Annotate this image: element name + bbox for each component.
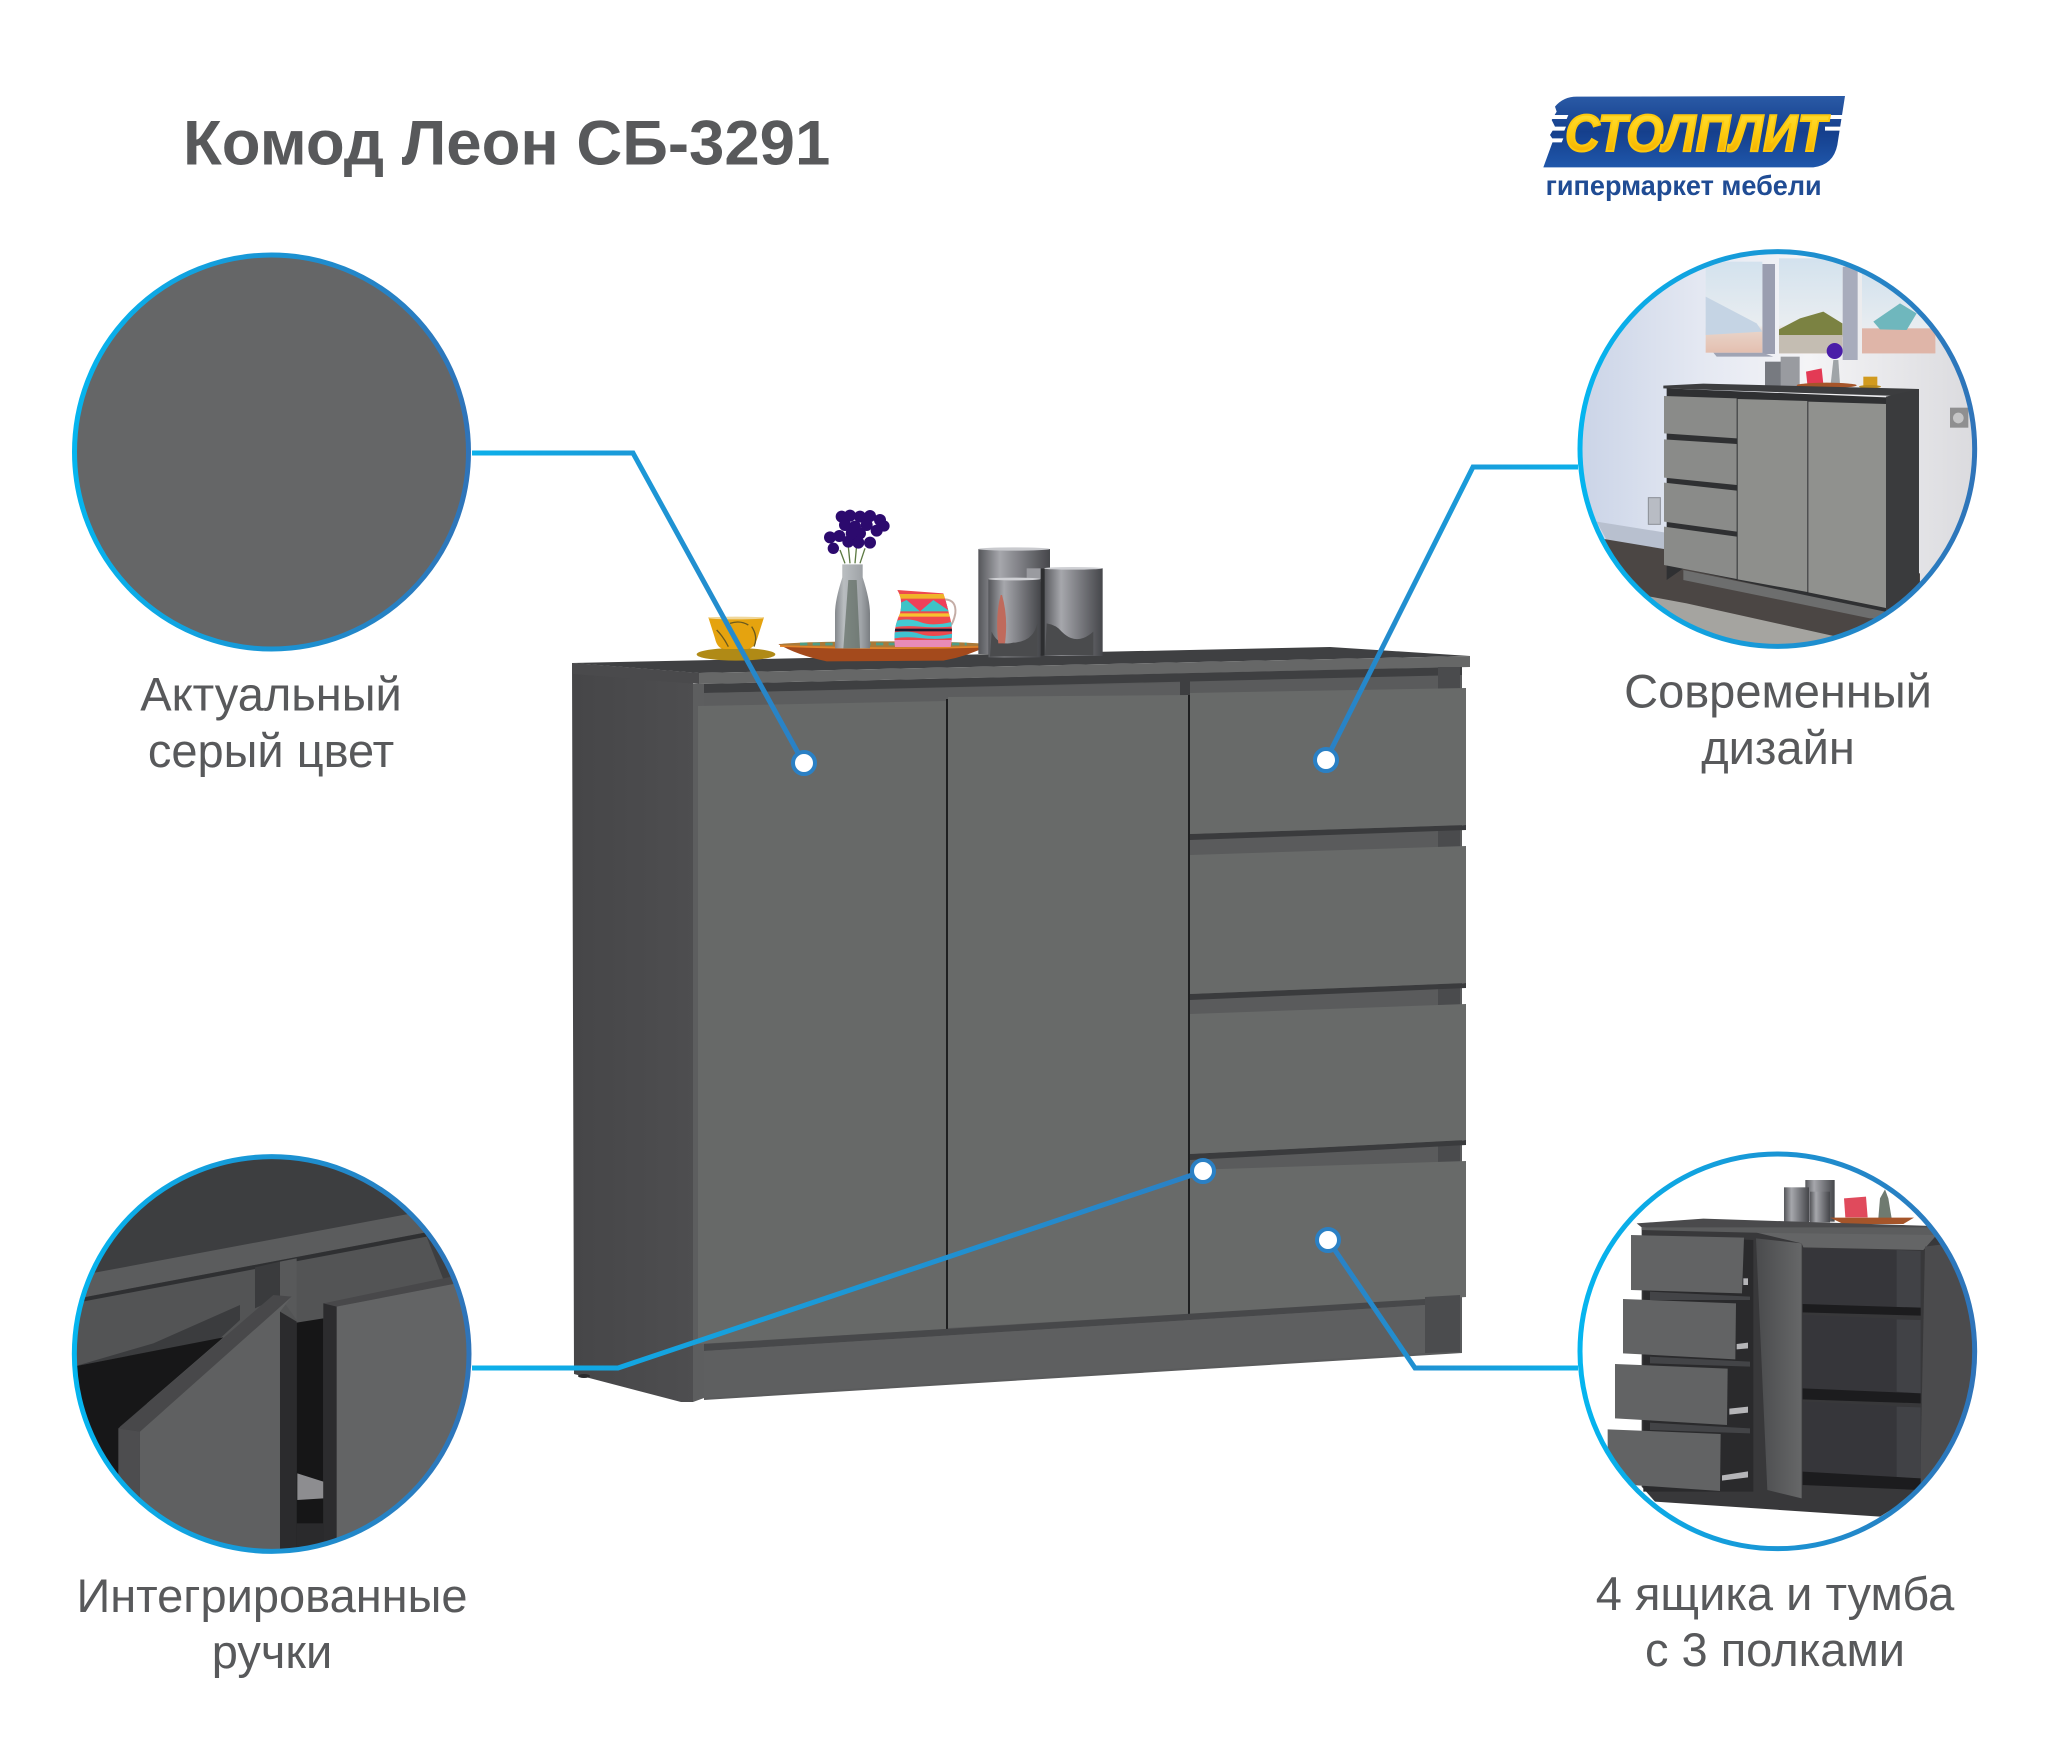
connector: drawers	[1328, 1240, 1578, 1368]
top front edge	[699, 656, 1470, 684]
chest of drawers	[572, 647, 1470, 1402]
logo tagline: гипермаркет мебели	[1546, 170, 1822, 201]
upper notch	[1180, 680, 1190, 699]
carcass	[1636, 1218, 1928, 1228]
connector: handles	[472, 1171, 1204, 1368]
title: Комод Леон СБ-3291	[183, 108, 830, 178]
cabinet top surface	[572, 647, 1470, 673]
open door	[1756, 1238, 1802, 1498]
socket and switch	[1648, 408, 1968, 524]
decor	[1784, 1180, 1914, 1224]
foot	[578, 1374, 590, 1378]
vase	[835, 564, 870, 648]
drawer fronts	[1631, 1235, 1744, 1293]
plinth shadow	[704, 1299, 1425, 1351]
carcass recess	[699, 667, 1462, 1400]
metal canisters	[978, 547, 1103, 657]
right leg	[1425, 1295, 1460, 1353]
flowers stems	[840, 545, 865, 563]
left door	[698, 701, 946, 1344]
label: handles: Интегрированные	[76, 1569, 468, 1622]
label: drawers and shelves: 4 ящика и тумба	[1596, 1567, 1954, 1620]
vase stems	[843, 580, 860, 648]
shelves	[1803, 1248, 1921, 1490]
right door	[948, 695, 1188, 1328]
label: design: Современный	[1624, 664, 1932, 718]
circle: open drawers and shelves	[1580, 1154, 1990, 1549]
drawer gap shadows	[1190, 825, 1466, 1160]
logo wordmark: СТОЛПЛИТ	[1565, 104, 1831, 162]
drawer 1	[1190, 688, 1466, 834]
circle: grey colour swatch	[74, 255, 468, 649]
circle: modern design interior scene	[1578, 249, 1978, 649]
label: colour: Актуальный	[140, 668, 402, 720]
drawer 3	[1190, 1004, 1466, 1154]
paintings	[1706, 258, 1935, 360]
drawer 4	[1190, 1161, 1466, 1314]
label: drawers and shelves: с 3 полками	[1645, 1623, 1905, 1676]
side panel front edge	[693, 684, 704, 1402]
callout dot: design	[1315, 749, 1337, 771]
logo stripes	[1547, 115, 1843, 142]
connector: design	[1326, 467, 1578, 760]
door gaps	[946, 695, 1190, 1329]
cup and saucer	[697, 617, 775, 661]
mini cabinet body	[1663, 384, 1919, 397]
callout dot: drawers	[1317, 1229, 1339, 1251]
right end column	[1438, 667, 1460, 1314]
mini cabinet decor	[1765, 343, 1881, 388]
cabinet side panel	[572, 663, 699, 1402]
patterned jug	[894, 590, 956, 647]
drawer 2	[1190, 846, 1466, 994]
flowers	[824, 510, 890, 554]
label: colour: серый цвет	[148, 724, 394, 777]
callout dot: colour	[793, 752, 815, 774]
logo band	[1543, 96, 1845, 167]
upper recess shadow	[704, 667, 1462, 693]
tray	[778, 641, 988, 661]
drawer rails	[1722, 1278, 1748, 1481]
label: design: дизайн	[1701, 721, 1855, 774]
drawer compartment	[1643, 1235, 1753, 1492]
upper rail	[704, 683, 1180, 708]
top left edge	[572, 663, 699, 684]
callout dot: handles	[1192, 1160, 1214, 1182]
circle: handles detail	[72, 1154, 472, 1554]
tabletop decor	[697, 510, 1103, 661]
label: handles: ручки	[212, 1625, 332, 1678]
logo: Столплит	[1543, 96, 1845, 201]
connector: colour	[472, 453, 803, 762]
plinth	[704, 1305, 1425, 1398]
